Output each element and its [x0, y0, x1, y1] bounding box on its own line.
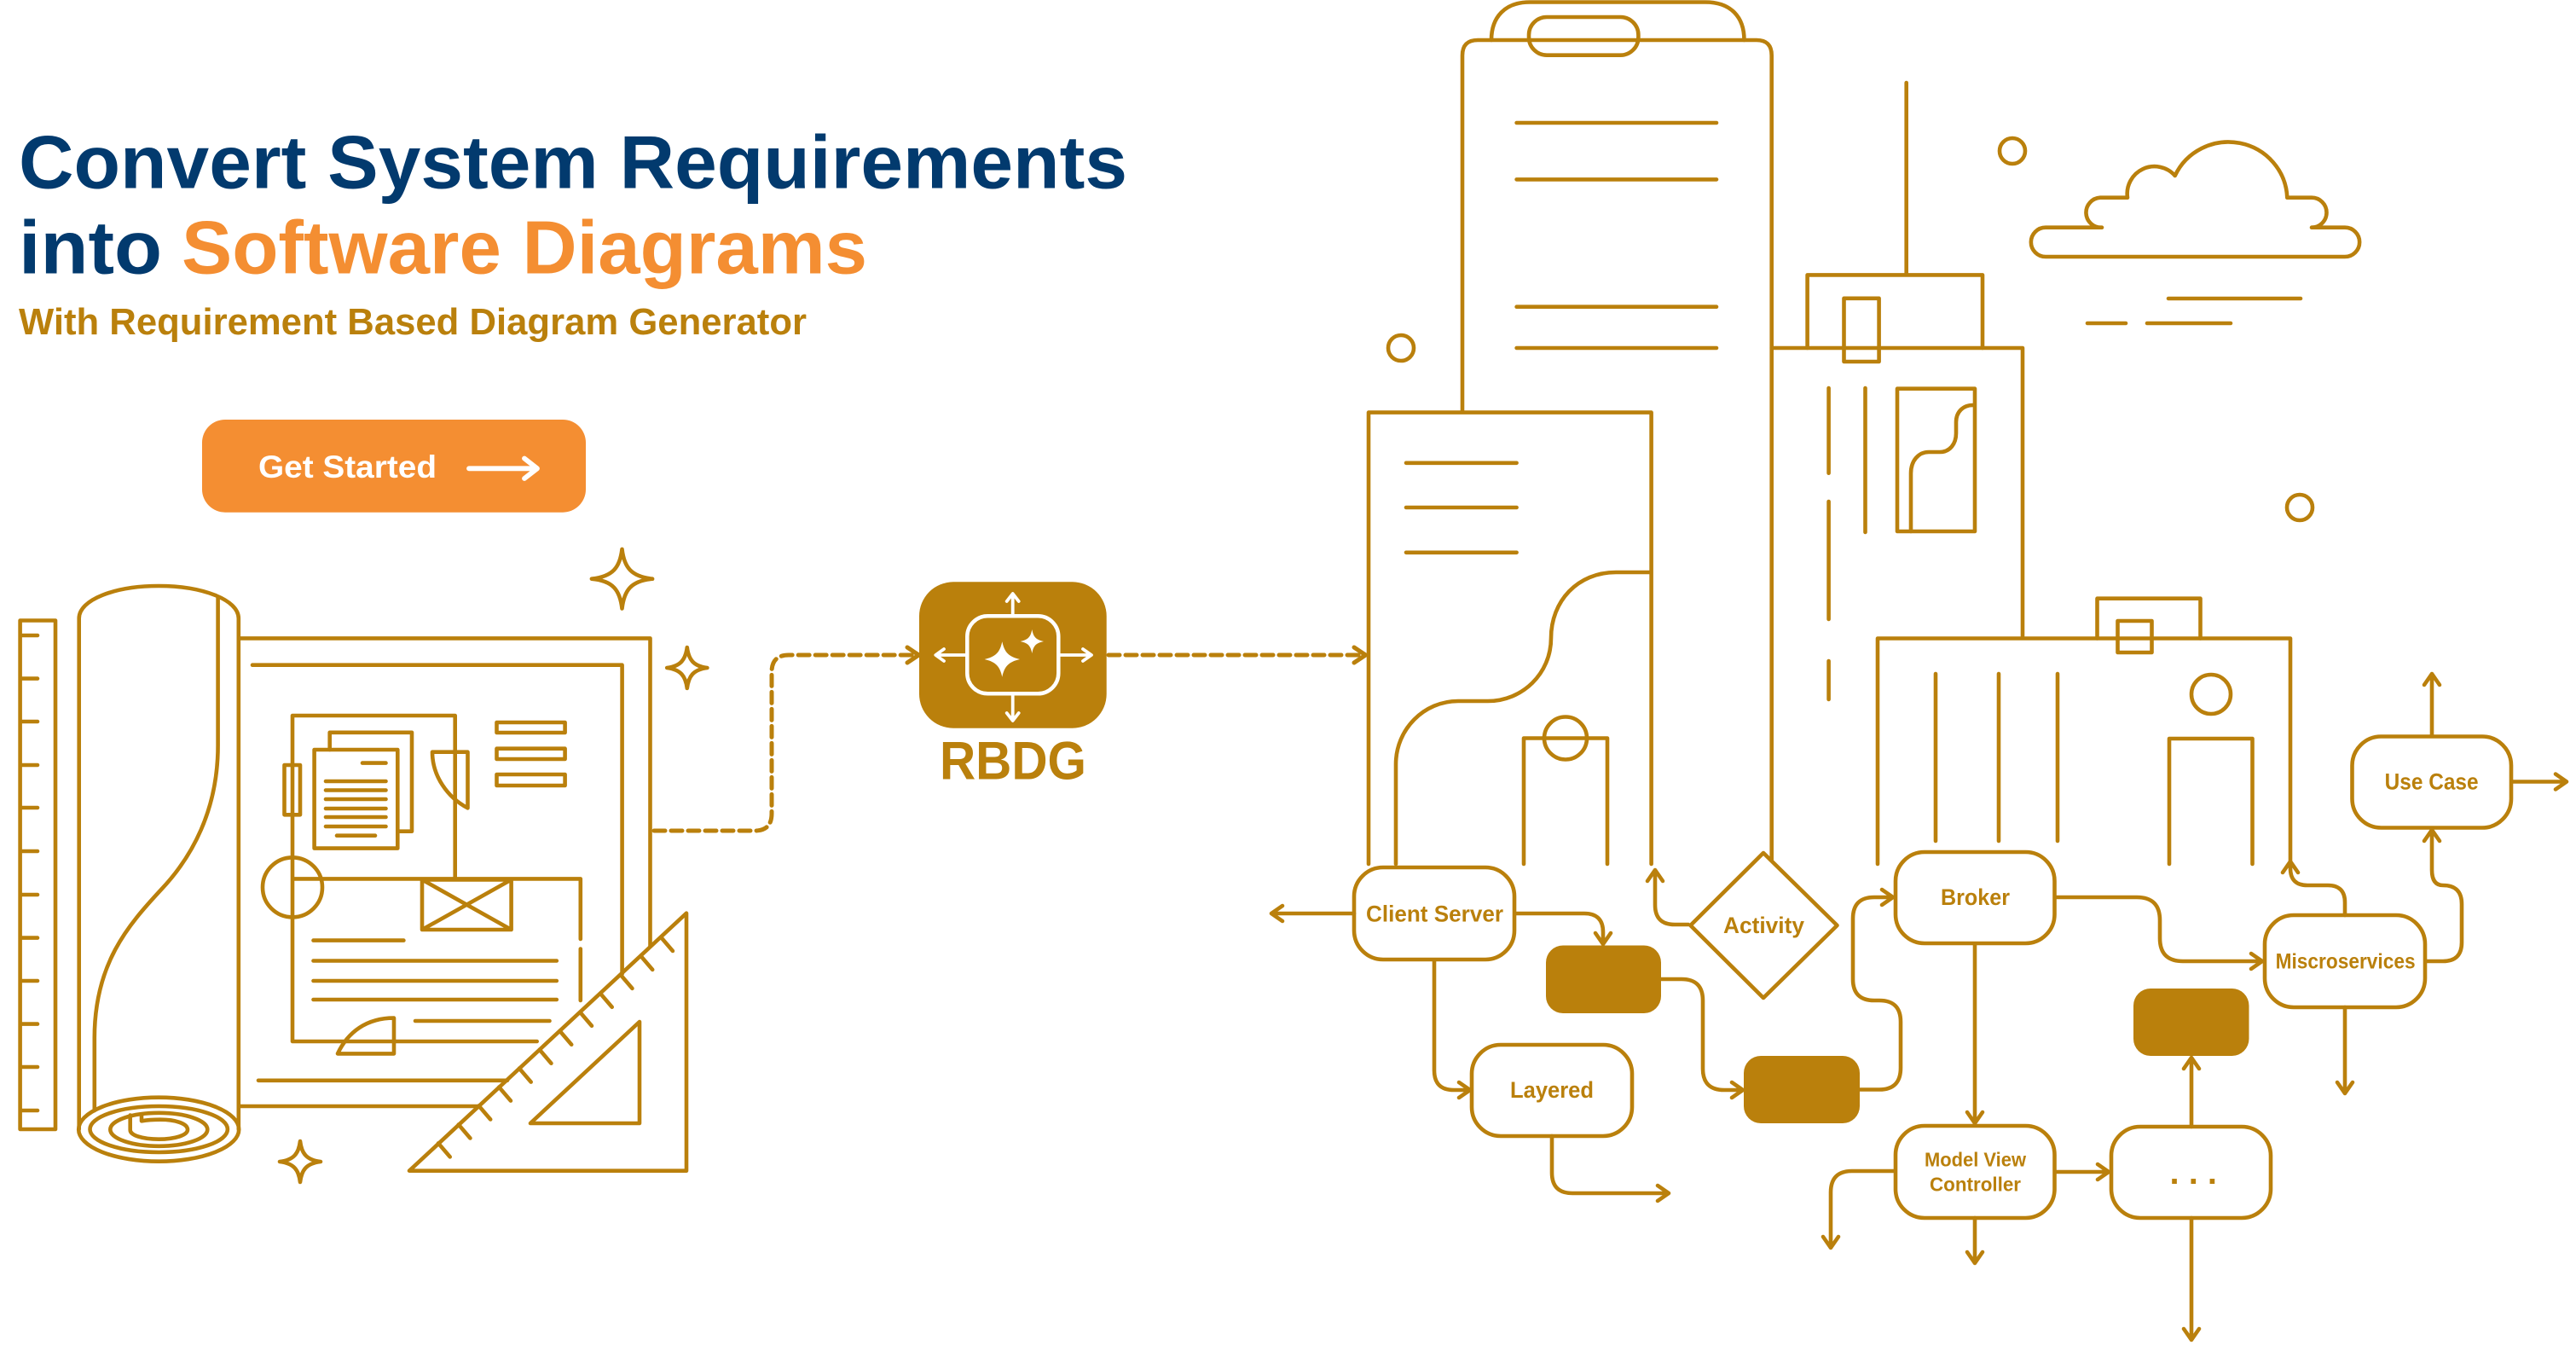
node: activity: Activity: [1723, 913, 1804, 938]
node: layered: Layered: [1510, 1077, 1594, 1103]
title: Software Diagrams: [182, 206, 867, 290]
plan text lines: [314, 941, 557, 1021]
blueprint roll: [78, 586, 239, 1162]
arrow: microservices down: [2337, 1007, 2353, 1093]
node: filled box 2: [1744, 1056, 1860, 1123]
arrow: blueprint to RBDG: [654, 647, 919, 831]
set square: [409, 913, 686, 1171]
button: get started: [202, 420, 586, 513]
blueprint sheet frame: [239, 638, 650, 1106]
column circle: [263, 857, 322, 917]
ruler: [20, 621, 55, 1129]
middle building: [1772, 83, 2023, 699]
node: broker: Broker: [1941, 884, 2010, 910]
title: Convert System Requirements: [19, 120, 1127, 205]
tall tower: [1462, 2, 1772, 860]
arrow: client server to filled node: [1515, 913, 1611, 944]
node: ellipsis: [2111, 1127, 2271, 1218]
node: use case: Use Case: [2385, 769, 2479, 795]
sparkle stars: [280, 549, 707, 1182]
front building: [1369, 413, 1652, 864]
node: microservices: Miscroservices: [2276, 950, 2416, 974]
wall marker: [285, 765, 300, 815]
arrow: use case right: [2512, 774, 2567, 790]
door swing: lower: [338, 1018, 394, 1053]
node: model view controller: Model View: [1925, 1148, 2026, 1170]
arrow: activity up: [1647, 870, 1688, 925]
arrow: microservices up: [2283, 861, 2345, 915]
door swing: upper: [432, 752, 467, 808]
subtitle: With Requirement Based Diagram Generator: [19, 301, 807, 343]
node: broker: [1896, 852, 2055, 943]
flow connectors and arrows: [1271, 674, 2567, 1340]
skyline illustration: [1369, 2, 2359, 864]
arrow: filled node to filled node: [1661, 979, 1743, 1098]
arrow: layered onward: [1552, 1136, 1669, 1201]
node: model view controller: Controller: [1930, 1174, 2021, 1196]
crossed box: [422, 879, 512, 930]
node: layered: [1472, 1045, 1632, 1136]
document stack: [315, 733, 412, 849]
node: client server: Client Server: [1366, 901, 1503, 926]
arrow: client server to layered: [1434, 960, 1470, 1098]
arrow: broker to model view controller: [1967, 944, 1983, 1123]
title: into: [19, 206, 162, 290]
arrow: filled node to broker: [1853, 890, 1901, 1090]
node: filled box 3: [2133, 989, 2249, 1056]
node: use case: [2352, 737, 2511, 827]
floor plan rooms: [292, 716, 581, 1041]
illustration: blueprint roll with set square: [20, 549, 707, 1182]
arrow: model view controller to dots: [2056, 1164, 2109, 1180]
title: [19, 120, 1127, 290]
node: filled box 1: [1546, 945, 1661, 1013]
node: microservices: [2265, 915, 2425, 1007]
node: model view controller: [1896, 1126, 2055, 1218]
RBDG label: RBDG: [940, 731, 1086, 791]
arrow: broker to microservices: [2055, 897, 2262, 969]
legend bars: [496, 722, 565, 786]
floating circles: [1388, 138, 2313, 520]
node: ellipsis: ...: [2169, 1154, 2217, 1192]
arrow: RBDG to buildings: [1109, 647, 1366, 663]
arrow: microservices to use case: [2424, 830, 2462, 961]
arrow: dots down: [2184, 1218, 2199, 1340]
arrow: model view controller left: [1823, 1171, 1894, 1248]
RBDG icon: [919, 582, 1107, 728]
cloud: [2031, 142, 2359, 323]
node: activity: [1690, 853, 1837, 998]
right building: [1878, 599, 2290, 864]
arrow: client server left: [1271, 906, 1354, 921]
arrow: dots up: [2184, 1058, 2199, 1127]
arrow: model view controller down: [1967, 1218, 1983, 1263]
node: client server: [1354, 867, 1514, 960]
button: get started: Get Started: [258, 449, 437, 484]
arrow: use case up: [2424, 674, 2440, 736]
